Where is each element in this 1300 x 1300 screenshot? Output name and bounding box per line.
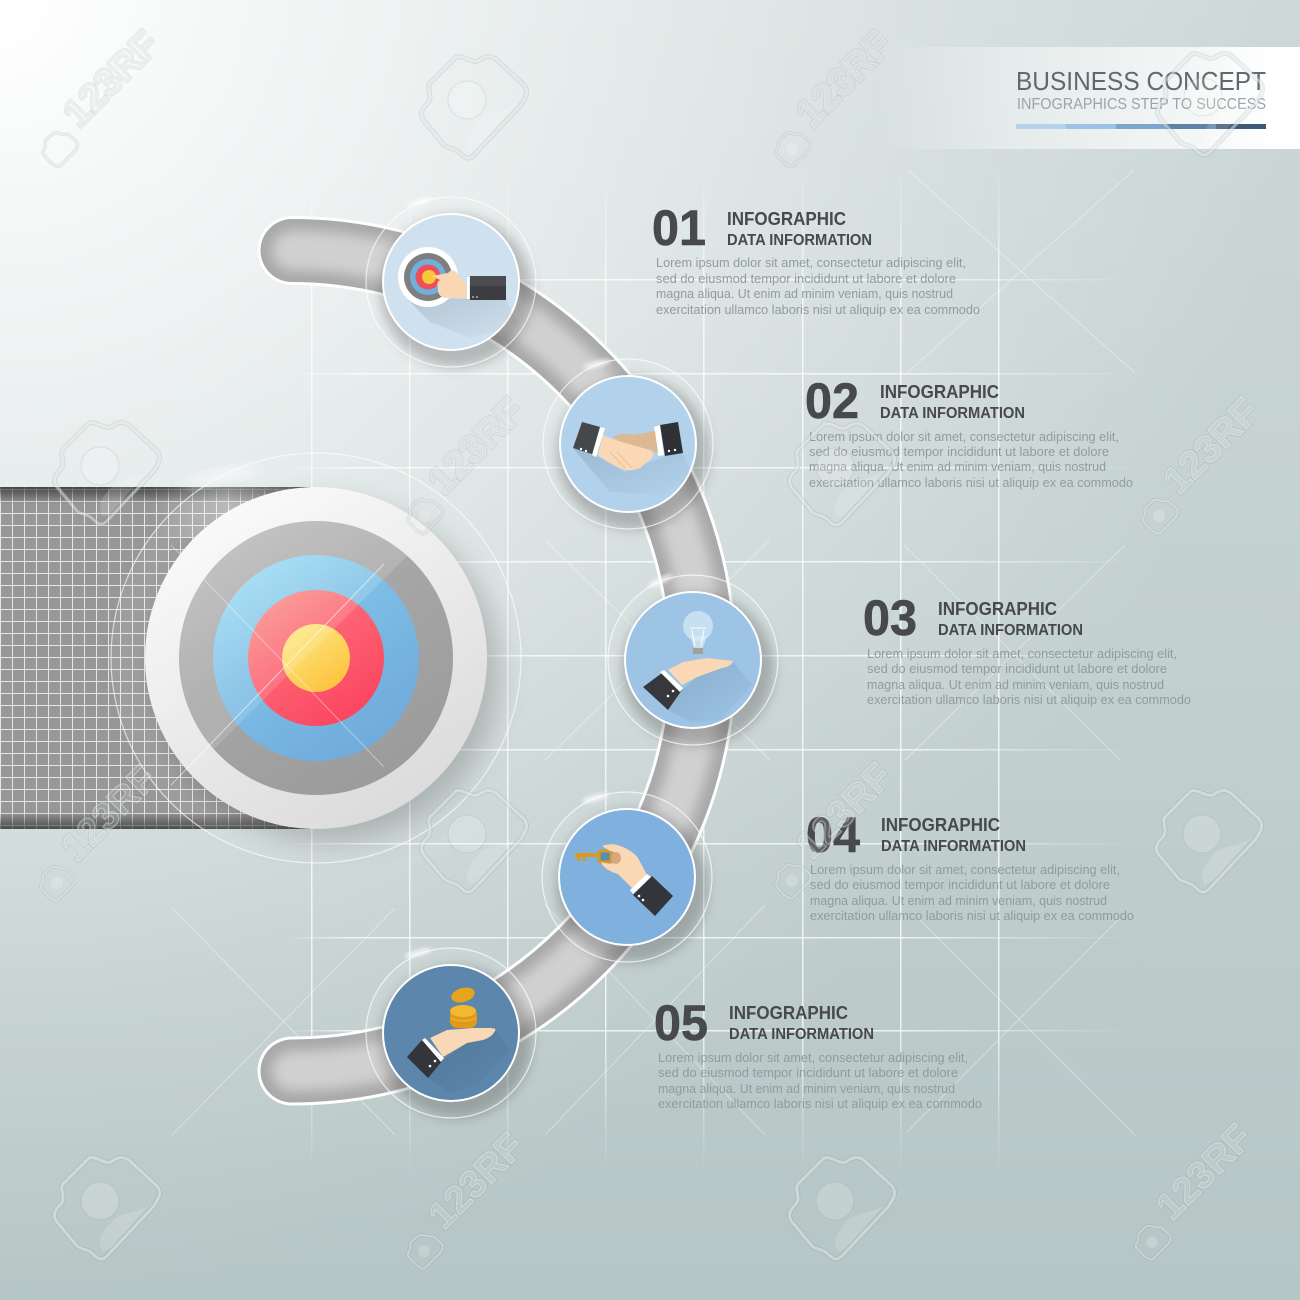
text block 05: sed do eiusmod tempor incididunt ut labore et dolore [658, 1066, 958, 1080]
step 5 node [366, 948, 536, 1118]
text block 01: sed do eiusmod tempor incididunt ut labore et dolore [656, 272, 956, 286]
watermarks: 123RF [421, 391, 532, 502]
step 4 node [542, 792, 712, 962]
watermarks: 123RF [1156, 391, 1267, 502]
watermarks: 123RF [789, 24, 900, 135]
target glass ring [111, 453, 521, 863]
text block 02: sed do eiusmod tempor incididunt ut labore et dolore [809, 445, 1109, 459]
text block 05: Lorem ipsum dolor sit amet, consectetur adipiscing elit, [658, 1051, 968, 1065]
text block 02: DATA INFORMATION [880, 405, 1025, 422]
watermarks: 123RF [789, 24, 900, 135]
text block 03: 03 [863, 590, 917, 646]
text block 04: 04 [806, 807, 860, 863]
watermarks: 123RF [421, 391, 532, 502]
watermarks: 123RF [789, 756, 900, 867]
text block 03: sed do eiusmod tempor incididunt ut labore et dolore [867, 662, 1167, 676]
text block 05: INFOGRAPHIC [729, 1003, 848, 1023]
target shadow [160, 502, 500, 842]
text block 03: exercitation ullamco laboris nisi ut aliquip ex ea commodo [867, 693, 1191, 707]
text block 01: INFOGRAPHIC [727, 209, 846, 229]
icon: target hand [398, 247, 518, 338]
background grid lines [172, 165, 1140, 1175]
text block 02 [805, 373, 1133, 490]
step 2 node [543, 359, 713, 529]
watermarks: 123RF [54, 758, 165, 869]
ring glints [404, 195, 674, 960]
text block 01: exercitation ullamco laboris nisi ut aliquip ex ea commodo [656, 303, 980, 317]
text block 04: exercitation ullamco laboris nisi ut aliquip ex ea commodo [810, 909, 1134, 923]
text block 02: exercitation ullamco laboris nisi ut aliquip ex ea commodo [809, 476, 1133, 490]
text block 05: 05 [654, 995, 708, 1051]
target rings [145, 487, 487, 829]
text block 03: Lorem ipsum dolor sit amet, consectetur adipiscing elit, [867, 647, 1177, 661]
header panel [880, 47, 1300, 149]
watermarks: 123RF [421, 1126, 532, 1237]
text block 04 [806, 807, 1134, 923]
text block 04: INFOGRAPHIC [881, 815, 1000, 835]
watermarks: 123RF [54, 758, 165, 869]
watermarks: 123RF [56, 24, 167, 135]
watermarks: 123RF [56, 24, 167, 135]
colour bar [1016, 124, 1266, 129]
text block 03: INFOGRAPHIC [938, 599, 1057, 619]
text block 01: Lorem ipsum dolor sit amet, consectetur adipiscing elit, [656, 256, 966, 270]
text block 01 [652, 200, 980, 317]
glint [184, 463, 260, 489]
watermarks: 123RF [789, 756, 900, 867]
text block 04: DATA INFORMATION [881, 838, 1026, 855]
text block 03 [863, 590, 1191, 707]
text block 05 [654, 995, 982, 1111]
step 3 node [608, 575, 778, 745]
step 1 node [366, 197, 536, 367]
text block 05: DATA INFORMATION [729, 1026, 874, 1043]
text block 05: magna aliqua. Ut enim ad minim veniam, quis nostrud [658, 1082, 955, 1096]
icon: key and hand [575, 844, 673, 916]
subtitle: INFOGRAPHICS STEP TO SUCCESS [1017, 96, 1266, 113]
text block 03: DATA INFORMATION [938, 622, 1083, 639]
watermarks: 123RF [1156, 391, 1267, 502]
mesh panel [0, 487, 310, 829]
text block 02: INFOGRAPHIC [880, 382, 999, 402]
text block 01: DATA INFORMATION [727, 232, 872, 249]
text block 01: magna aliqua. Ut enim ad minim veniam, quis nostrud [656, 287, 953, 301]
watermarks: 123RF [421, 1126, 532, 1237]
icon: bulb and hand [643, 611, 752, 722]
target [111, 453, 521, 863]
text block 04: sed do eiusmod tempor incididunt ut labore et dolore [810, 878, 1110, 892]
text block 02: magna aliqua. Ut enim ad minim veniam, quis nostrud [809, 460, 1106, 474]
watermarks: 123RF [1149, 1117, 1260, 1228]
curved path band [292, 250, 702, 1071]
text block 02: 02 [805, 373, 859, 429]
icon: coins and hand [407, 985, 510, 1092]
text block 04: magna aliqua. Ut enim ad minim veniam, quis nostrud [810, 894, 1107, 908]
text block 03: magna aliqua. Ut enim ad minim veniam, quis nostrud [867, 678, 1164, 692]
text block 02: Lorem ipsum dolor sit amet, consectetur adipiscing elit, [809, 430, 1119, 444]
text block 04: Lorem ipsum dolor sit amet, consectetur adipiscing elit, [810, 863, 1120, 877]
target shine [179, 521, 407, 749]
title: BUSINESS CONCEPT [1016, 66, 1266, 96]
watermarks: 123RF [1149, 1117, 1260, 1228]
text block 05: exercitation ullamco laboris nisi ut aliquip ex ea commodo [658, 1097, 982, 1111]
text block 01: 01 [652, 200, 706, 256]
icon: handshake [573, 422, 692, 495]
